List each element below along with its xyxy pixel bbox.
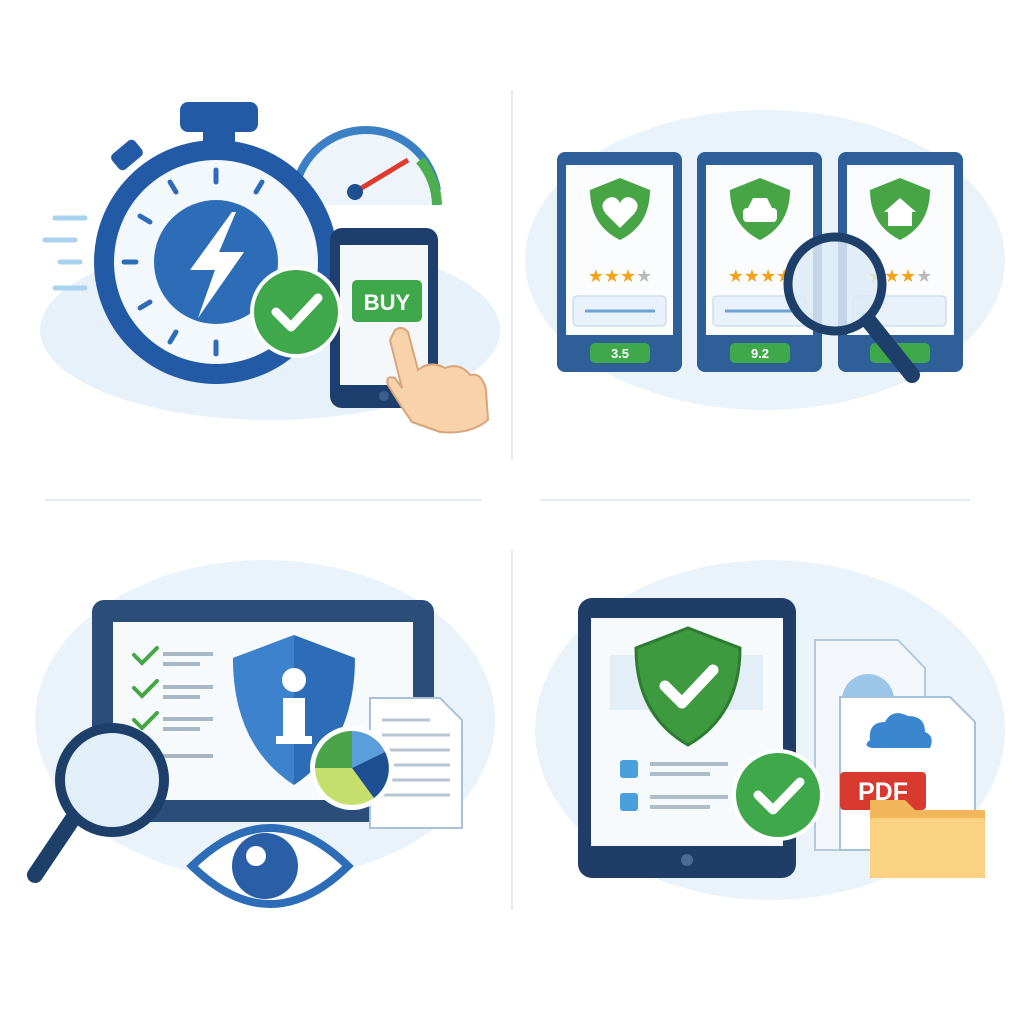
icon: stopwatch <box>94 102 338 384</box>
icon: magnifier <box>788 237 912 375</box>
phone card 3: ★★★★ <box>868 266 932 286</box>
checklist <box>134 648 213 756</box>
icon: folder <box>870 800 985 878</box>
background blob <box>35 560 495 880</box>
icon: document <box>370 698 462 828</box>
phone card 2 <box>697 152 822 372</box>
icon: monitor <box>92 600 434 822</box>
checkbox list <box>620 760 728 811</box>
panel: compare quadrant <box>525 110 1005 410</box>
phone card 1: ★★★★ <box>588 266 652 286</box>
back document <box>815 640 925 850</box>
panel: transparency quadrant <box>35 560 495 904</box>
background blob <box>535 560 1005 900</box>
icon: pie chart <box>310 726 394 810</box>
phone card 1: 3.5 <box>611 346 629 361</box>
phone card 2: ★★★★ <box>728 266 792 286</box>
icon: hand <box>387 328 488 432</box>
panel: documents quadrant <box>535 560 1005 900</box>
icon: magnifier <box>35 728 164 875</box>
icon: eye <box>192 828 348 904</box>
icon: green shield <box>636 628 740 745</box>
icon: tablet <box>578 598 796 878</box>
phone card 1 <box>557 152 682 372</box>
icon: PDF document <box>840 697 975 850</box>
phone card 2: 9.2 <box>751 346 769 361</box>
background blob <box>40 240 500 420</box>
icon: green check <box>250 266 342 358</box>
icon: gauge <box>290 130 440 205</box>
icon: PDF document: PDF <box>858 778 908 806</box>
icon: info shield <box>233 635 355 785</box>
icon: green check circle <box>732 749 824 841</box>
speed lines <box>45 218 85 288</box>
phone card 3 <box>838 152 963 372</box>
icon: phone with BUY: BUY <box>364 290 411 315</box>
panel: speed quadrant <box>40 102 500 432</box>
icon: phone with BUY <box>330 228 438 408</box>
background blob <box>525 110 1005 410</box>
